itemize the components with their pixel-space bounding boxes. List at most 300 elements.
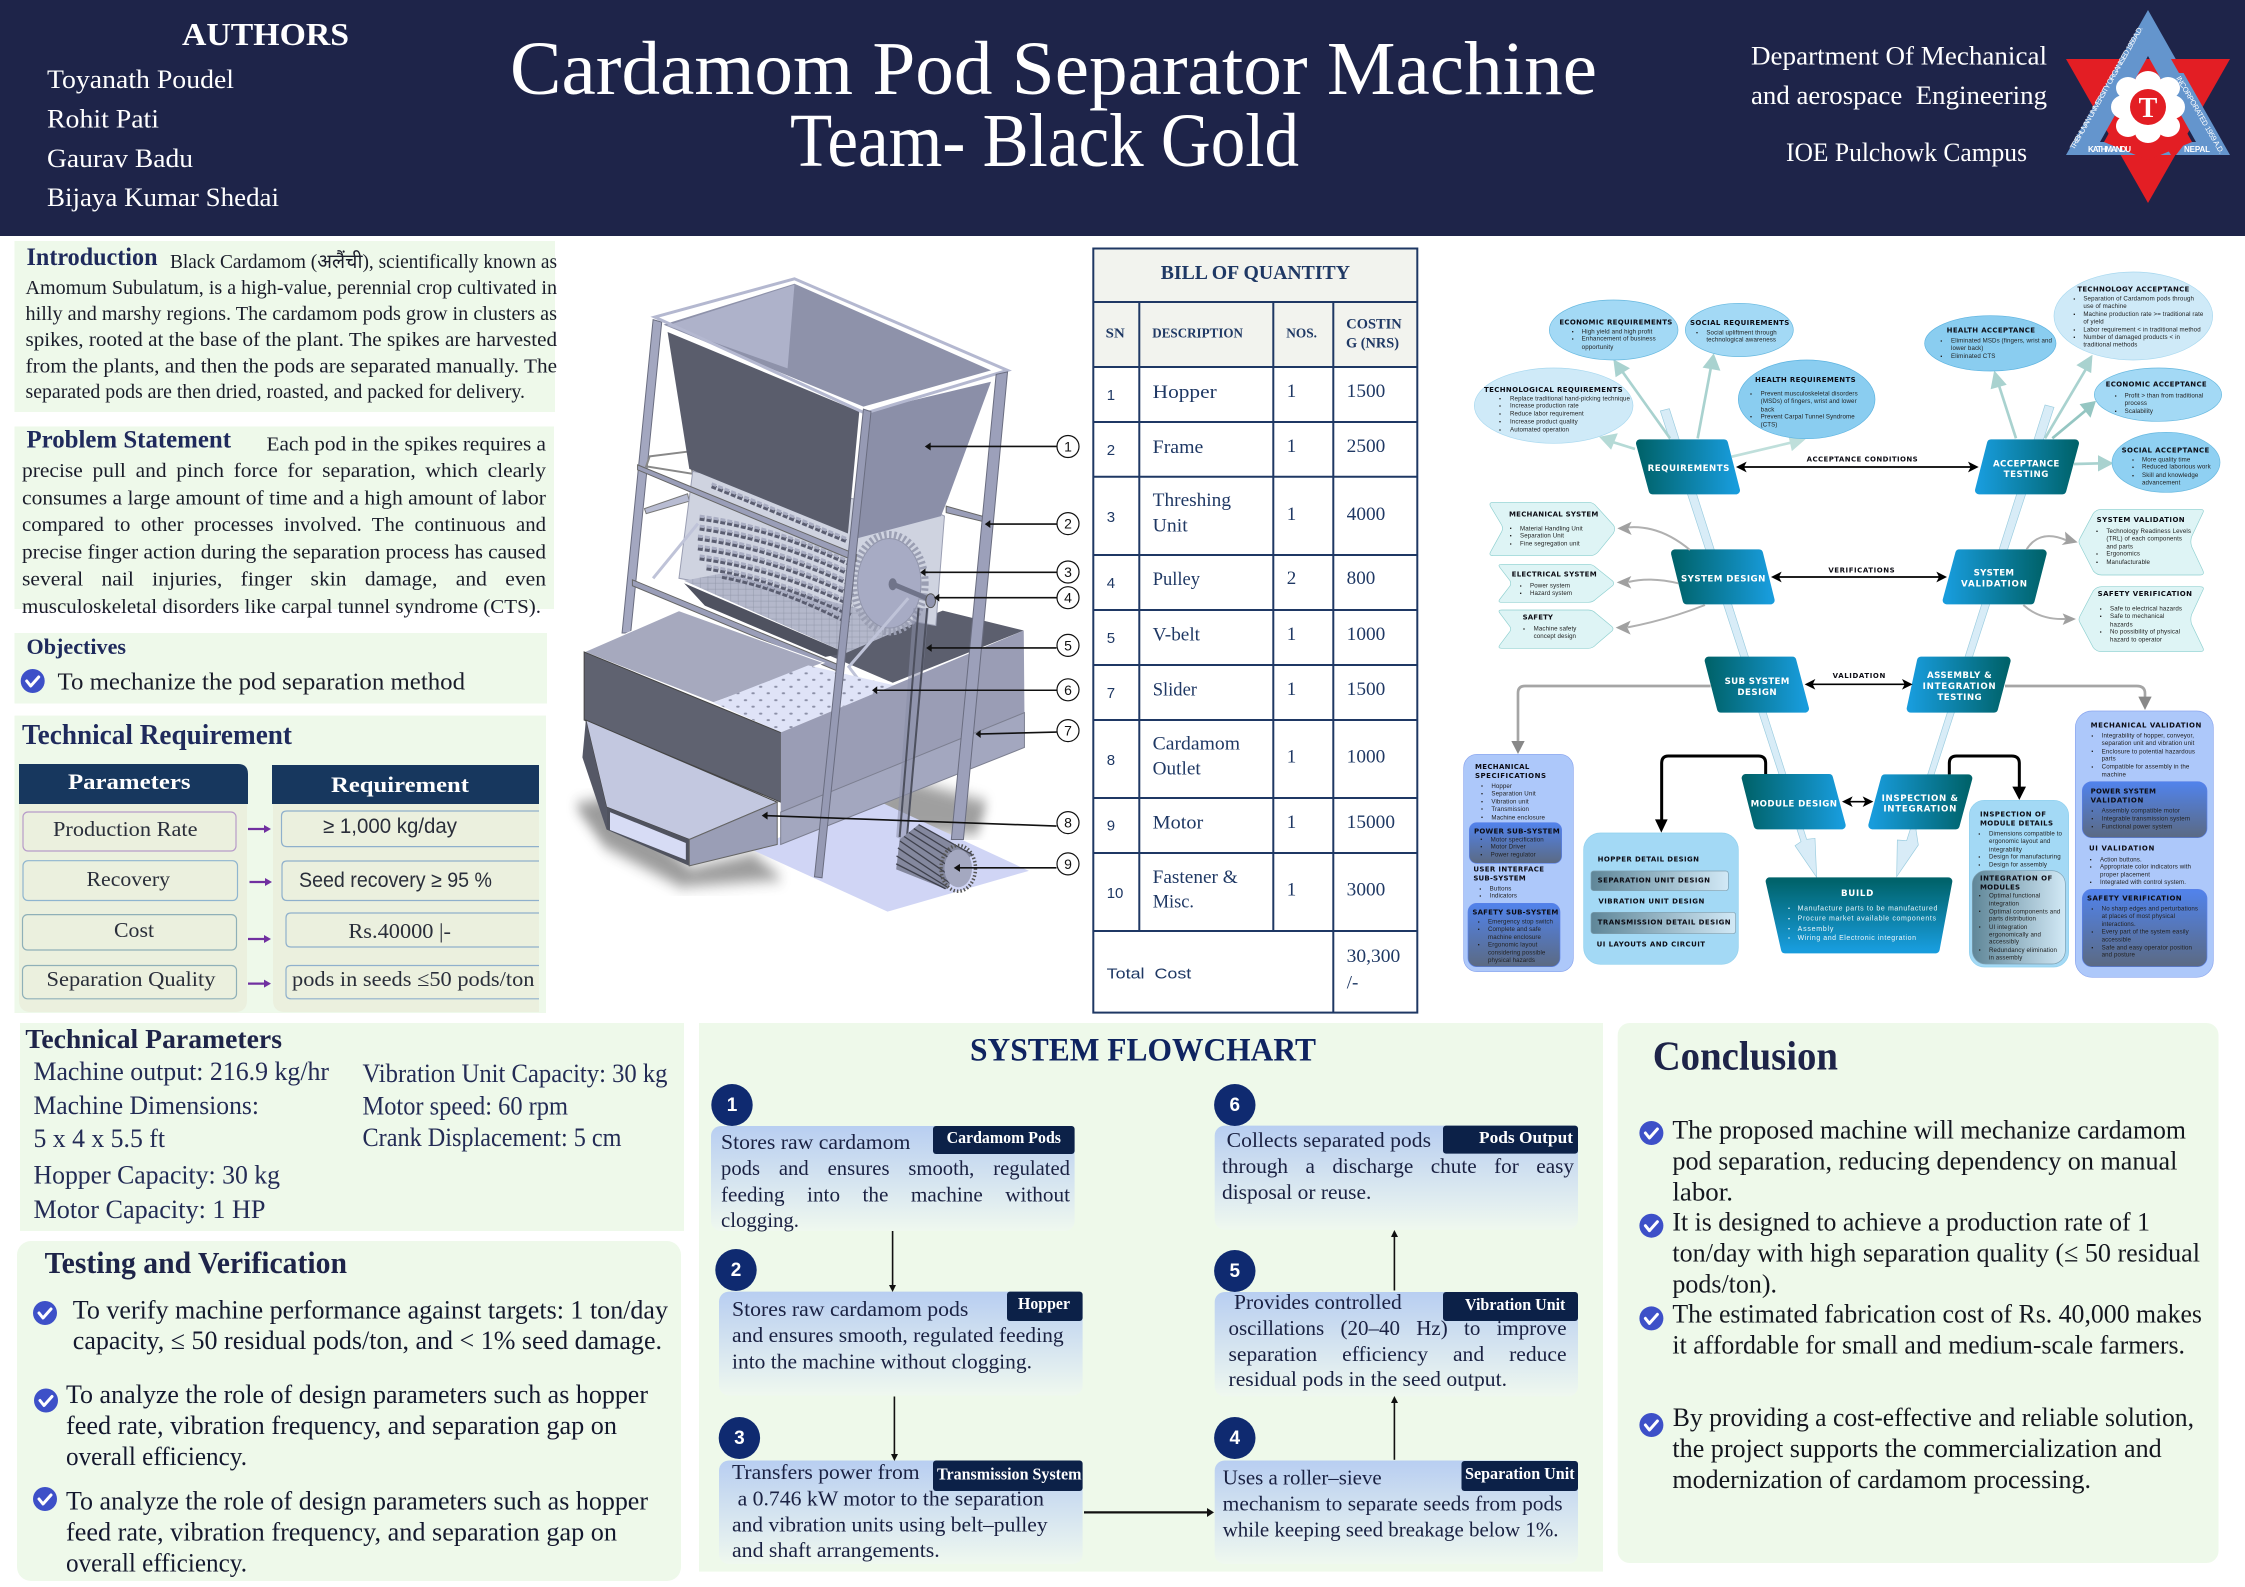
column: parameters: Recovery [86,867,171,891]
step 5: vibration unit [1214,1250,1578,1396]
panel: mechanical validation: Action buttons. [2100,856,2142,863]
sub-panel: safety sub-system: physical hazards [1488,957,1535,964]
callout numbers: 1 [1064,438,1072,454]
step 6: pods output: through a discharge chute for easy [1222,1154,1574,1178]
box: module design [1746,778,1842,825]
sub-panel: integration of modules: INTEGRATION OF [1980,875,2053,883]
sub-panel: safety verification: accessible [2102,937,2132,944]
sub-panel: integration of modules: in assembly [1989,954,2023,961]
panel: mechanical validation: Integrability of hopper, conveyor, [2102,733,2194,740]
sub-panel: safety verification: Safe and easy operator position [2102,944,2193,951]
sub-panel: power system validation: Functional power system [2102,823,2172,830]
table: bill of quantity: 1 [1287,624,1296,645]
step 4: separation unit [1214,1417,1578,1564]
text: introduction body [26,250,557,403]
bubble: technological requirements [1474,368,1633,443]
block: system validation list: Manufacturable [2106,559,2151,566]
sub-panel: power sub-system: Motor Driver [1491,844,1526,851]
bubble: health acceptance: Eliminated CTS [1951,353,1995,360]
bullet: analyze design parameters: overall efficiency. [66,1442,247,1471]
box: system design: SYSTEM DESIGN [1681,574,1765,584]
bullet: verify performance: capacity, ≤ 50 residual pods/ton, and < 1% seed damage. [73,1326,662,1355]
bullet: mechanize: labor. [1672,1176,1733,1206]
column: requirement: ≥ 1,000 kg/day [323,815,457,838]
table: bill of quantity: 10 [1107,885,1123,902]
sub-panel: power system validation: Assembly compatible motor [2102,808,2180,815]
bullet: mechanize: pod separation, reducing dependency on manual [1672,1145,2177,1175]
table: bill of quantity: G (NRS) [1346,336,1399,352]
bubble: social requirements [1685,303,1793,357]
bubble: economic acceptance: ECONOMIC ACCEPTANCE [2106,380,2207,388]
bubble: health requirements: HEALTH REQUIREMENTS [1755,376,1856,384]
sub-panel: safety sub-system [1468,903,1560,967]
table: bill of quantity: 1000 [1347,624,1385,645]
text: problem statement body [22,434,546,618]
table: bill of quantity: 2 [1107,442,1115,459]
bullet: mechanize: The proposed machine will mechanize cardamom [1672,1114,2186,1144]
table: bill of quantity [1093,248,1417,1013]
block: mechanical system [1490,502,1615,556]
bubble: health requirements [1738,360,1875,439]
icon: university logo [2066,10,2230,203]
panel: mechanical validation: separation unit and vibration unit [2102,740,2195,747]
bubble: technological requirements: Replace traditional hand-picking technique [1510,395,1631,402]
authors block: Gaurav Badu [47,144,193,173]
step 1: cardamom pods: 1 [727,1095,738,1116]
bubble: social acceptance [2112,432,2220,492]
table: bill of quantity: 5 [1107,630,1115,647]
panel: mechanical validation: MECHANICAL VALIDATION [2091,722,2201,730]
bullet: production rate: ton/day with high separation quality (≤ 50 residual [1672,1237,2200,1267]
bullet: commercialization: the project supports the commercialization and [1672,1433,2162,1463]
bullet: verify performance [33,1295,668,1355]
arrow: verifications [1771,566,1947,582]
text: problem statement body: precise finger action during the separation process has caused [22,542,546,564]
department block: IOE Pulchowk Campus [1786,138,2027,167]
column: requirement: Rs.40000 |- [348,919,451,943]
bubble: economic requirements [1549,300,1678,360]
sub-panel: safety sub-system: considering possible [1488,950,1546,957]
step 3: transmission system: Transfers power from [732,1460,920,1484]
bubble: social acceptance: More quality time [2142,456,2191,463]
box: inspection and integration: INTEGRATION [1883,805,1956,815]
authors block: AUTHORS [182,16,349,52]
sub-panel: integration of modules: MODULES [1980,884,2020,892]
table: bill of quantity: DESCRIPTION [1152,326,1243,342]
callout numbers: 2 [1064,516,1072,532]
step 4: separation unit: while keeping seed breakage below 1%. [1223,1517,1558,1541]
step 3: transmission system [719,1417,1083,1564]
box: acceptance testing [1979,443,2075,490]
callout numbers: 7 [1064,723,1072,739]
block: safety verification list: Safe to mechanical [2110,613,2164,620]
panel: inspection of module details [1969,800,2069,967]
panel: inspection of module details: ergonomic layout and [1989,838,2051,845]
text: parameters left column: Machine Dimensions: [34,1091,259,1120]
block: safety: concept design [1534,633,1577,640]
panel: detail design: VIBRATION UNIT DESIGN [1598,897,1704,905]
bubble: technological requirements: Reduce labor requirement [1510,411,1584,418]
text: parameters right column [362,1059,668,1152]
sub-panel: power sub-system [1469,823,1562,863]
step 4: separation unit: 4 [1230,1428,1241,1449]
box: module design: MODULE DESIGN [1751,800,1837,810]
panel: mechanical specifications: Separation Unit [1491,791,1536,798]
bullet: analyze design parameters repeated: To analyze the role of design parameters such as hopper [66,1486,648,1515]
table: bill of quantity: SN [1106,326,1125,342]
box: build: Procure market available components [1798,916,1936,923]
bullet: verify performance: To verify machine performance against targets: 1 ton/day [73,1295,668,1324]
text: introduction body: hilly and marshy regions. The cardamom pods grow in clusters as [26,303,557,325]
sub-panel: integration of modules [1972,871,2065,964]
step 1: cardamom pods: pods and ensures smooth, regulated [721,1156,1070,1180]
heading: technical requirement: Technical Requirement [22,720,293,751]
column: requirement [272,765,539,1012]
heading: system flowchart: SYSTEM FLOWCHART [970,1032,1316,1068]
bullet: analyze design parameters [34,1380,648,1471]
arrow: validation [1805,672,1913,690]
sub-panel: power sub-system: Motor specification [1491,836,1544,843]
box: inspection and integration: INSPECTION & [1882,794,1958,804]
bullet: commercialization: modernization of cardamom processing. [1672,1464,2091,1494]
arrow: module to inspection [1842,796,1873,807]
panel: inspection of module details: Design for manufacturing [1989,854,2061,861]
sub-panel: integration of modules: Optimal components and [1989,908,2061,915]
authors block: Rohit Pati [47,104,159,134]
icon: university logo: TRIBHUVAN UNIVERSITY ORGANISED 1959 A.D. [2068,25,2145,151]
block: safety verification list: hazards [2110,621,2133,628]
panel: objectives [14,633,547,704]
step 5: vibration unit: Provides controlled [1234,1290,1402,1314]
block: mechanical system: Fine segregation unit [1520,541,1580,548]
table: bill of quantity: Motor [1153,812,1204,834]
bubble: economic acceptance: process [2125,400,2147,407]
text: introduction body: from the plants, and then the pods are separated manually. The [26,356,557,378]
box: build: Manufacture parts to be manufactured [1798,906,1937,913]
sub-panel: safety verification [2082,889,2207,967]
block: safety: SAFETY [1523,614,1554,622]
column: parameters [19,764,248,1012]
callout numbers [1057,436,1079,875]
bubble: economic requirements: High yield and high profit [1582,328,1653,335]
bubble: technological requirements: Increase product quality [1510,418,1579,425]
text: parameters left column: Hopper Capacity: 30 kg [34,1161,280,1190]
panel: inspection of module details: integrability [1989,846,2023,853]
bubble: social requirements: SOCIAL REQUIREMENTS [1690,319,1789,327]
heading: testing and verification: Testing and Verification [45,1245,347,1280]
step 2: hopper [715,1249,1083,1396]
sub-panel: safety verification: interactions. [2102,921,2136,928]
block: system validation list: Technology Readiness Levels [2106,528,2191,535]
panel: introduction [14,241,557,412]
block: system validation list: Ergonomics [2106,551,2140,558]
bullet: production rate: pods/ton). [1672,1268,1777,1298]
step 1: cardamom pods: Cardamom Pods [947,1128,1062,1147]
table: bill of quantity: Pulley [1153,569,1200,590]
column: requirement: Requirement [331,772,470,797]
sub-panel: integration of modules: ergonomically and [1989,931,2042,938]
block: electrical system [1499,564,1614,602]
box: system validation: SYSTEM [1974,569,2014,579]
heading: objectives: Objectives [26,634,126,659]
step 3: transmission system: 3 [734,1428,745,1449]
box: sub system design [1709,661,1805,709]
step 6: pods output: Pods Output [1479,1128,1574,1147]
panel: inspection of module details: MODULE DETAILS [1980,820,2053,828]
text: problem statement body: compared to other processes involved. The continuous and [22,514,546,536]
arrows: curved gray branches [1616,522,2078,635]
block: mechanical system: Separation Unit [1520,533,1564,540]
title: Team- Black Gold [790,99,1299,183]
panel: mechanical validation: UI VALIDATION [2089,845,2154,853]
table: bill of quantity: Frame [1153,437,1203,458]
block: safety: Machine safety [1534,626,1577,633]
bubble: social acceptance: SOCIAL ACCEPTANCE [2122,446,2210,454]
heading: technical parameters: Technical Parameters [25,1024,282,1054]
bubble: health acceptance [1925,316,2056,371]
table: bill of quantity: Cardamom [1153,734,1240,754]
table: bill of quantity: 3000 [1347,880,1385,901]
step 5: vibration unit: residual pods in the seed output. [1228,1367,1507,1391]
box: build: Wiring and Electronic integration [1798,935,1916,942]
panel: system flowchart [699,1023,1603,1572]
department block: and aerospace Engineering [1751,81,2047,110]
text: parameters right column: Crank Displacement: 5 cm [362,1123,622,1152]
illustration: machine 3D model with callouts [574,279,1079,912]
block: system validation list: (TRL) of each components [2106,535,2182,542]
table: bill of quantity: 2500 [1347,436,1385,457]
panel: mechanical validation: Enclosure to potential hazardous [2102,748,2195,755]
box: assembly and integration testing: TESTING [1937,693,1982,703]
arrows: requirements to bubbles [1602,356,2111,469]
sub-panel: safety sub-system: Ergonomic layout [1488,942,1538,949]
text: problem statement body: consumes a large amount of time and a high amount of labor [22,488,546,510]
icon: university logo: KATHMANDU [2088,145,2131,154]
sub-panel: power system validation: POWER SYSTEM [2091,788,2156,796]
bullet: analyze design parameters repeated [33,1486,648,1577]
step 3: transmission system: and shaft arrangements. [732,1538,940,1562]
bullet: analyze design parameters repeated: overall efficiency. [66,1548,247,1577]
panel: mechanical validation: Compatible for assembly in the [2102,764,2190,771]
bullet: commercialization: By providing a cost-effective and reliable solution, [1673,1402,2194,1432]
bullet: production rate: It is designed to achieve a production rate of 1 [1672,1206,2150,1236]
arrow: acceptance conditions: ACCEPTANCE CONDITIONS [1807,456,1918,464]
panel: mechanical specifications: Transmission [1491,806,1530,813]
sub-panel: integration of modules: parts distribution [1989,916,2037,923]
sub-panel: integration of modules: UI integration [1989,924,2028,931]
sub-panel: safety sub-system: machine enclosure [1488,934,1542,941]
box: build [1770,881,1948,949]
sub-panel: safety verification: No sharp edges and perturbations [2102,906,2198,913]
step 6: pods output: Collects separated pods [1227,1128,1431,1152]
table: bill of quantity: 800 [1347,568,1375,589]
arrow: sub system to specifications [1511,686,1711,754]
icon: university logo: NEPAL [2184,145,2210,154]
arrows: parameter to requirement [248,825,272,988]
table: bill of quantity: BILL OF QUANTITY [1161,262,1351,284]
panel: mechanical validation: machine [2102,771,2127,778]
text: parameters left column: Machine output: 216.9 kg/hr [34,1057,329,1086]
bullet: analyze design parameters: To analyze the role of design parameters such as hopper [66,1380,648,1409]
step 1: cardamom pods [711,1084,1075,1232]
text: introduction body: separated pods are then dried, roasted, and packed for delivery. [26,381,525,403]
arrow: validation: VALIDATION [1833,672,1885,680]
sub-panel: integration of modules: Redundancy elimination [1989,947,2058,954]
block: safety verification list: No possibility of physical [2110,629,2180,636]
bubble: health requirements: (CTS) [1761,422,1777,429]
box: system validation: VALIDATION [1961,580,2027,590]
panel: detail design: UI LAYOUTS AND CIRCUIT [1597,940,1705,948]
text: problem statement body: musculoskeletal disorders like carpal tunnel syndrome (CTS). [22,596,541,618]
text: parameters left column: Motor Capacity: 1 HP [34,1195,266,1224]
title [510,27,1597,183]
block: safety [1499,610,1613,648]
text: parameters left column: 5 x 4 x 5.5 ft [34,1124,166,1153]
table: bill of quantity: 1 [1287,880,1296,901]
bubble: economic requirements: Enhancement of business [1582,336,1656,343]
arrow: acceptance conditions [1736,456,1979,472]
block: safety verification list: hazard to operator [2110,637,2162,644]
step 4: separation unit: Separation Unit [1465,1464,1575,1483]
table: bill of quantity: 3 [1107,509,1115,526]
table: bill of quantity: 1 [1287,679,1296,700]
block: mechanical system: MECHANICAL SYSTEM [1509,511,1598,519]
sub-panel: power system validation: Integrable transmission system [2102,815,2190,822]
table: bill of quantity: 30,300 [1347,946,1400,967]
block: safety verification list: SAFETY VERIFICATION [2098,590,2192,598]
sub-panel: integration of modules: integration [1989,900,2020,907]
bubble: economic acceptance: Scalability [2125,408,2154,415]
header band [0,0,2245,236]
table: bill of quantity: Fastener & [1153,867,1238,888]
text: problem statement body: Each pod in the spikes requires a [266,434,546,456]
panel: testing and verification [17,1241,681,1581]
sub-panel: safety verification: SAFETY VERIFICATION [2087,895,2182,903]
panel: detail design: SEPARATION UNIT DESIGN [1598,876,1710,884]
block: electrical system: ELECTRICAL SYSTEM [1512,571,1597,579]
table: bill of quantity: Unit [1153,516,1188,536]
box: assembly and integration testing [1911,661,2007,709]
arrow: module to detail design [1655,756,1766,833]
table: bill of quantity: Outlet [1153,758,1201,779]
panel: mechanical validation: parts [2102,756,2116,763]
panel: inspection of module details: Dimensions compatible to [1989,831,2063,838]
department block: Department Of Mechanical [1751,42,2047,70]
step 3: transmission system: a 0.746 kW motor to the separation [738,1486,1045,1510]
text: parameters right column: Motor speed: 60 rpm [362,1092,568,1120]
callout numbers: 6 [1064,682,1072,698]
text: objective: To mechanize the pod separation method [58,670,465,696]
box: acceptance testing: TESTING [2004,470,2048,480]
heading: conclusion: Conclusion [1653,1033,1838,1079]
table: bill of quantity: 4 [1107,575,1115,592]
bubble: health acceptance: lower back) [1951,345,1983,352]
bubble: technology acceptance: Labor requirement < in traditional method [2083,327,2201,334]
bubble: technological requirements: TECHNOLOGICAL REQUIREMENTS [1484,386,1623,394]
bubble: health requirements: Prevent musculoskeletal disorders [1761,391,1858,398]
table: bill of quantity: Slider [1153,680,1198,701]
text: problem statement body: precise pull and pinch force for separation, which clearly [22,460,546,482]
block: safety verification list [2079,587,2203,652]
step 1: cardamom pods: Stores raw cardamom [721,1130,910,1154]
table: bill of quantity: NOS. [1286,326,1317,342]
bullet: fabrication cost: it affordable for small and medium-scale farmers. [1672,1329,2185,1359]
panel: mechanical validation [2075,711,2213,977]
panel: technical requirement [14,716,546,1013]
text: introduction body: spikes, rooted at the base of the plant. The spikes are harvested [26,329,557,351]
column: parameters: Parameters [68,769,191,794]
panel: conclusion [1618,1023,2218,1563]
box: build: BUILD [1841,889,1873,899]
panel: mechanical specifications [1464,754,1573,972]
panel: mechanical specifications: Hopper [1491,783,1512,790]
bubble: economic requirements: opportunity [1582,344,1614,351]
bullet: commercialization [1639,1402,2194,1494]
step 3: transmission system: and vibration units using belt–pulley [732,1512,1048,1536]
column: requirement: Seed recovery ≥ 95 % [299,869,492,892]
bubble: economic requirements: ECONOMIC REQUIREMENTS [1559,318,1672,326]
column: requirement: pods in seeds ≤50 pods/ton [292,967,535,991]
step 2: hopper: and ensures smooth, regulated feeding [732,1323,1064,1347]
table: bill of quantity: 4000 [1347,504,1385,525]
sub-panel: power system validation: VALIDATION [2091,797,2143,805]
sub-panel: integration of modules: accessibly [1989,939,2020,946]
sub-panel: power sub-system: Power regulator [1491,852,1536,859]
step 6: pods output [1214,1084,1578,1230]
column: parameters: Production Rate [53,817,198,841]
sub-panel: safety verification: at places of most physical [2102,913,2175,920]
bullet: production rate [1639,1206,2200,1298]
panel: detail design [1584,833,1738,964]
text: introduction body: Black Cardamom (अलैंची), scientifically known as [170,250,557,273]
bubble: technology acceptance: Number of damaged products < in [2083,334,2181,341]
bubble: economic acceptance [2094,368,2222,421]
step 4: separation unit: Uses a roller–sieve [1223,1465,1382,1489]
authors block [47,16,349,212]
text: parameters left column [34,1057,329,1224]
step 2: hopper: 2 [731,1260,741,1281]
box: requirements: REQUIREMENTS [1648,464,1729,474]
bullet: fabrication cost [1639,1298,2202,1359]
authors block: Toyanath Poudel [47,65,234,94]
bubble: technology acceptance [2054,272,2213,360]
block: system validation list: and parts [2106,544,2133,551]
arrow: inspection to module details [1949,756,2026,800]
table: bill of quantity: 1 [1287,812,1296,833]
sub-panel: power system validation [2082,782,2207,838]
table: bill of quantity: 1 [1287,746,1296,767]
diagram: V-model systems engineering [1464,272,2222,977]
step 2: hopper: Hopper [1018,1294,1070,1313]
panel: inspection of module details: INSPECTION OF [1980,811,2046,819]
heading: problem statement: Problem Statement [26,427,232,454]
table: bill of quantity: 1 [1287,436,1296,457]
table: bill of quantity: 8 [1107,752,1115,769]
bubble: social requirements: Social upliftment through [1706,329,1777,336]
step 1: cardamom pods: clogging. [721,1208,799,1232]
step 3: transmission system: Transmission System [937,1465,1082,1484]
icon: university logo: T [2139,93,2158,124]
block: mechanical system: Material Handling Unit [1520,525,1583,532]
step 5: vibration unit: 5 [1230,1261,1241,1282]
box: build: Assembly [1798,926,1834,933]
panel: mechanical specifications: Buttons [1490,886,1511,893]
table: bill of quantity: 2 [1287,568,1296,589]
bubble: technology acceptance: Machine production rate >= traditional rate [2083,311,2204,318]
bubble: social acceptance: Skill and knowledge [2142,472,2199,479]
column: parameters: Separation Quality [46,967,216,991]
sub-panel: safety sub-system: Emergency stop switch [1488,919,1554,926]
